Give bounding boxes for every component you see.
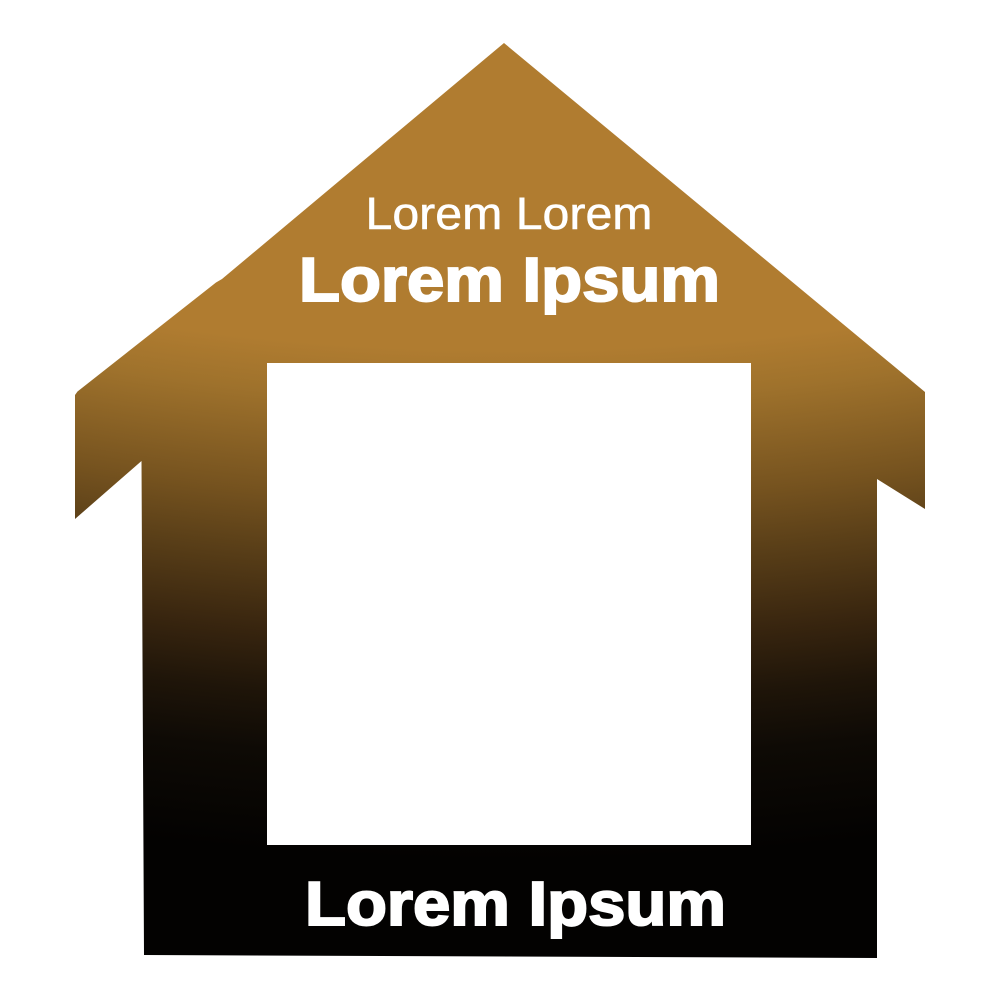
roof heading: Lorem Ipsum [299,246,720,315]
bottom heading: Lorem Ipsum [305,870,726,939]
roof subtitle: Lorem Lorem [366,188,652,239]
white centre panel [267,363,751,845]
house shape [75,43,925,958]
